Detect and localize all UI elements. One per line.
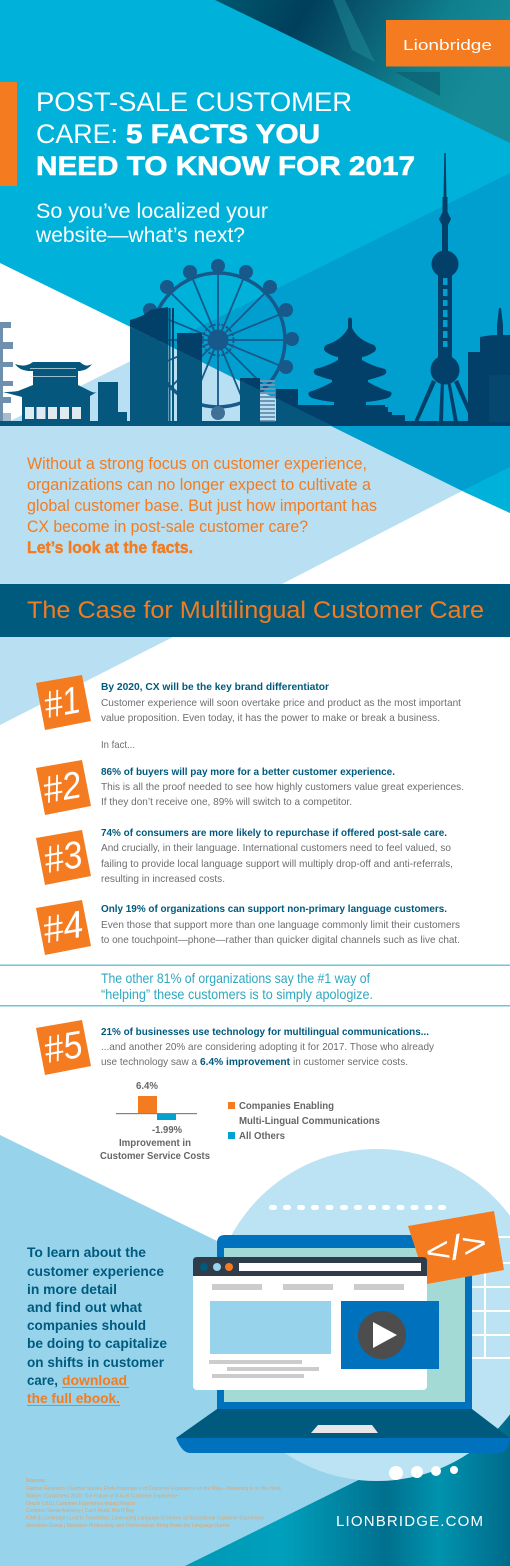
chart legend xyxy=(228,1101,380,1142)
icon: code tag: </> xyxy=(422,1224,490,1272)
fact 4 xyxy=(36,900,460,955)
fact 3 text: resulting in increased costs. xyxy=(101,873,225,885)
chart legend: Multi-Lingual Communications xyxy=(239,1116,380,1127)
fact 2 text: 86% of buyers will pay more for a better customer experience. xyxy=(101,766,395,778)
callout: apology statistic: “helping” these customers is to simply apologize. xyxy=(101,986,373,1002)
pagoda silhouette xyxy=(0,322,13,422)
fact 1 text xyxy=(101,681,461,751)
fact 1 text: In fact... xyxy=(101,739,135,751)
fact 5 text xyxy=(101,1026,435,1068)
footer background shapes xyxy=(0,1135,510,1566)
sources: Aberdeen Group | Maximize Productivity and Performance: Bring Down the Language Barrier xyxy=(26,1523,230,1529)
title: 5 FACTS YOU xyxy=(126,119,320,149)
badge 4: #4 xyxy=(40,904,87,952)
sources: Sources: xyxy=(26,1478,46,1484)
illustration: laptop with browser window xyxy=(176,1211,510,1453)
logo: Lionbridge badge xyxy=(386,20,510,66)
sources: Walker | Customers 2020: The Future of B-to-B Customer Experience xyxy=(26,1494,178,1500)
fact 5 text: in customer service costs. xyxy=(293,1056,408,1068)
fact 2 text: This is all the proof needed to see how highly customers value great experiences. xyxy=(101,781,464,793)
title: CARE: xyxy=(36,119,118,149)
temple windows xyxy=(25,368,81,419)
badge 3: #3 xyxy=(41,834,86,882)
website address: LIONBRIDGE.COM xyxy=(336,1513,483,1530)
decorative dots xyxy=(389,1466,458,1480)
intro paragraph: global customer base. But just how important has xyxy=(27,497,377,515)
sources xyxy=(26,1478,281,1529)
callout: apology statistic: The other 81% of organizations say the #1 way of xyxy=(101,970,370,986)
intro paragraph: organizations can no longer expect to cultivate a xyxy=(27,476,372,494)
fact 3 xyxy=(36,827,453,885)
tower windows xyxy=(443,278,448,347)
fact 2 text xyxy=(101,766,464,808)
subtitle xyxy=(35,200,268,247)
sources: Oracle | 2011 Customer Experience Impact Report xyxy=(26,1501,136,1507)
white grid behind laptop xyxy=(472,1236,510,1359)
call to action text: customer experience xyxy=(27,1263,164,1279)
accent bar xyxy=(0,82,17,186)
fact 4 text: Only 19% of organizations can support non-primary language customers. xyxy=(101,903,447,915)
bar chart: customer service cost improvement: Customer Service Costs xyxy=(100,1151,210,1162)
buildings, temples and tower xyxy=(130,153,510,426)
subtitle: website—what’s next? xyxy=(35,224,245,247)
fact 2 xyxy=(36,760,464,815)
call to action text: the full ebook. xyxy=(27,1390,120,1406)
call to action text xyxy=(27,1244,167,1406)
fact 3 text xyxy=(101,827,453,885)
fact 4 text: to one touchpoint—phone—rather than quicker digital channels such as live chat. xyxy=(101,934,460,946)
subtitle: So you’ve localized your xyxy=(36,200,268,223)
fact 1 text: Customer experience will soon overtake price and product as the most important xyxy=(101,697,461,709)
fact 5 text: 21% of businesses use technology for multilingual communications... xyxy=(101,1026,429,1038)
photo: top-right technology image xyxy=(215,0,510,143)
fact 5 xyxy=(36,1020,435,1075)
logo: Lionbridge badge: Lionbridge xyxy=(403,37,492,54)
title: POST-SALE CUSTOMER xyxy=(36,87,352,117)
bar chart: customer service cost improvement xyxy=(100,1081,210,1162)
video player xyxy=(341,1301,439,1369)
call to action text: in more detail xyxy=(27,1281,117,1297)
title: NEED TO KNOW FOR 2017 xyxy=(36,151,415,181)
skyline illustration xyxy=(0,153,510,426)
chart legend: Companies Enabling xyxy=(239,1101,334,1112)
fact 2 text: If they don’t receive one, 89% will switch to a competitor. xyxy=(101,796,352,808)
bar chart: customer service cost improvement: Improvement in xyxy=(119,1138,191,1149)
bar chart: customer service cost improvement: -1.99% xyxy=(152,1125,182,1136)
badge 2: #2 xyxy=(40,764,85,812)
laptop screen xyxy=(217,1235,472,1410)
browser window xyxy=(193,1257,427,1390)
call to action text: and find out what xyxy=(27,1299,142,1315)
sources: ICMI & Lionbridge | Lost in Translation: Leveraging Language to Deliver an Exceptional Customer Experience xyxy=(26,1516,264,1522)
fact 3 text: failing to provide local language support will multiply drop-off and anti-referrals, xyxy=(101,858,453,870)
dotted line above laptop xyxy=(269,1205,446,1210)
call to action text: companies should xyxy=(27,1317,146,1333)
chart legend: All Others xyxy=(239,1131,285,1142)
sources: Common Sense Advisory | Can’t Read, Won’t Buy xyxy=(26,1508,134,1514)
icon: code tag xyxy=(408,1211,504,1284)
bar chart: customer service cost improvement: 6.4% xyxy=(136,1081,158,1092)
intro paragraph xyxy=(27,455,377,557)
fact 4 text xyxy=(101,903,460,946)
fact 4 text: Even those that support more than one language commonly limit their customers xyxy=(101,919,460,931)
callout: apology statistic xyxy=(0,964,510,1006)
call to action text: care, xyxy=(27,1372,58,1388)
intro paragraph: Without a strong focus on customer experience, xyxy=(27,455,367,473)
badge 1: #1 xyxy=(41,679,84,727)
call to action text: download xyxy=(62,1372,127,1388)
fact 1 xyxy=(36,675,461,751)
right towers xyxy=(468,308,510,422)
decorative corner under banner xyxy=(0,637,173,725)
sources: Gartner Research | Gartner Survey Finds Importance of Customer Experience on the Rise—Marketing is on the Hook xyxy=(26,1486,281,1492)
laptop base xyxy=(176,1409,510,1453)
striped tower xyxy=(260,380,275,422)
ferris wheel xyxy=(143,259,299,420)
fact 5 text: ...and another 20% are considering adopting it for 2017. Those who already xyxy=(101,1041,435,1053)
call to action text: be doing to capitalize xyxy=(27,1335,167,1351)
fact 3 text: 74% of consumers are more likely to repurchase if offered post-sale care. xyxy=(101,827,447,839)
intro paragraph: CX become in post-sale customer care? xyxy=(27,518,308,536)
background: header and intro geometry xyxy=(0,0,510,640)
section banner xyxy=(0,584,510,637)
fact 3 text: And crucially, in their language. International customers need to feel valued, so xyxy=(101,842,451,854)
fact 1 text: By 2020, CX will be the key brand differentiator xyxy=(101,681,329,693)
fact 5 text: use technology saw a xyxy=(101,1056,197,1068)
call to action text: on shifts in customer xyxy=(27,1354,165,1370)
badge 5: #5 xyxy=(41,1024,86,1072)
fact 1 text: value proposition. Even today, it has the power to make or break a business. xyxy=(101,712,440,724)
intro paragraph: Let’s look at the facts. xyxy=(27,539,193,557)
fact 5 text: 6.4% improvement xyxy=(200,1056,290,1068)
title xyxy=(36,87,415,181)
section banner: The Case for Multilingual Customer Care xyxy=(27,597,484,624)
call to action text: To learn about the xyxy=(27,1244,146,1260)
